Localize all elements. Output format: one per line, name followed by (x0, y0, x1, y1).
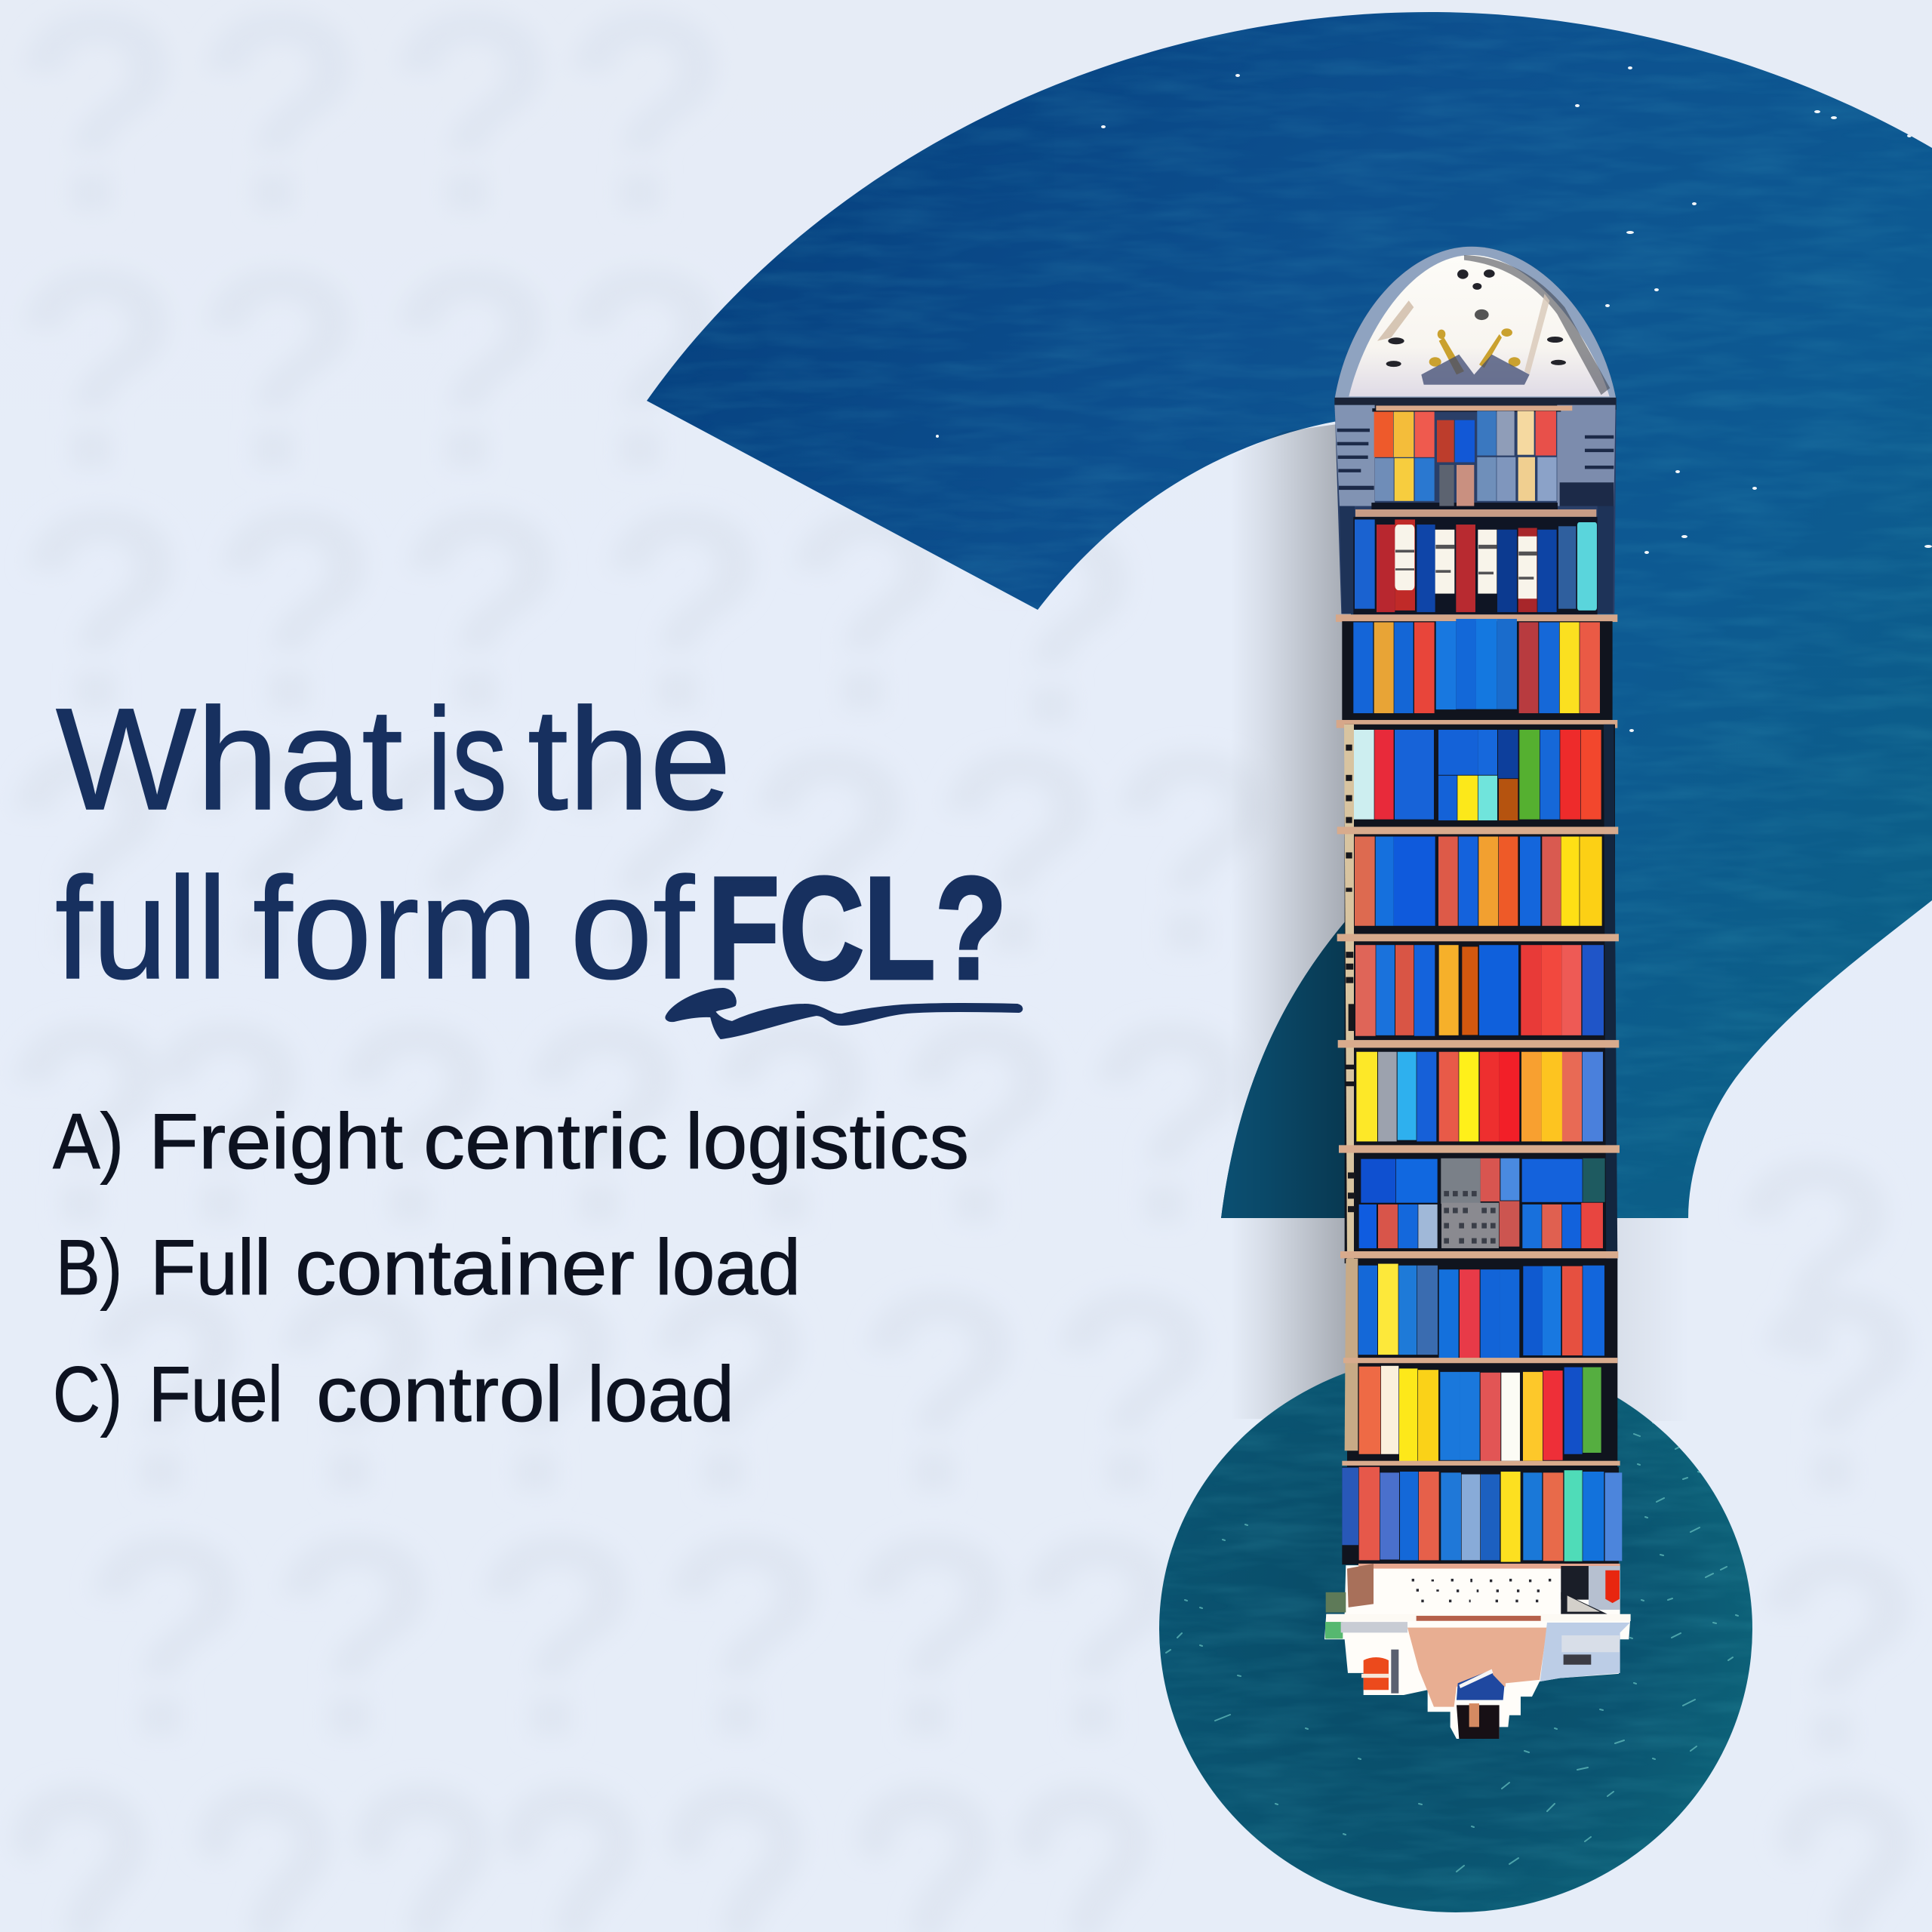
option C (53, 1351, 734, 1438)
container row 4 (1337, 730, 1618, 834)
option B (56, 1224, 801, 1312)
background pattern: faint question marks: ? (596, 450, 771, 771)
background pattern: faint question marks: ? (140, 963, 315, 1284)
option C: C) (53, 1351, 122, 1438)
background pattern: faint question marks: ? (844, 1476, 1020, 1797)
heading line 2: full (55, 847, 227, 1009)
option A: logistics (685, 1098, 969, 1186)
bow containers (1355, 405, 1596, 517)
heading (55, 678, 1007, 1009)
heading line 1: the (528, 678, 731, 840)
container row 2 (1336, 519, 1617, 622)
background pattern: faint question marks: ? (642, 1231, 817, 1552)
question mark: ocean dot (1155, 1343, 1758, 1917)
option A (53, 1098, 969, 1186)
background pattern: faint question marks: ? (14, 450, 189, 771)
background pattern: faint question marks: ? (208, 450, 383, 771)
background pattern: faint question marks: ? (0, 691, 175, 1012)
option B: load (655, 1224, 801, 1312)
background pattern: faint question marks: ? (0, 963, 175, 1284)
background pattern: faint question marks: ? (366, 691, 541, 1012)
background pattern: faint question marks: ? (781, 450, 956, 771)
container row 5 (1337, 836, 1619, 941)
background pattern: faint question marks: ? (706, 963, 881, 1284)
option C: control (316, 1351, 563, 1438)
background pattern: faint question marks: ? (517, 963, 692, 1284)
container row 7 (1339, 1052, 1620, 1153)
ship bow (1334, 247, 1617, 728)
option C: Fuel (149, 1351, 283, 1438)
background pattern: faint question marks: ? (1083, 963, 1258, 1284)
container row 9 (1343, 1264, 1617, 1363)
background pattern: faint question marks: ? (558, 208, 734, 529)
background pattern: faint question marks: ? (268, 1231, 443, 1552)
question mark: ocean hook and stem (604, 0, 1932, 1223)
background pattern: faint question marks: ? (932, 691, 1107, 1012)
container row 10 (1342, 1366, 1620, 1466)
heading line 2 (55, 847, 695, 1009)
background pattern: faint question marks: ? (1045, 1231, 1220, 1552)
background pattern: faint question marks: ? (1011, 1476, 1186, 1797)
ship shadow on background (1230, 421, 1690, 1421)
background pattern: faint question marks: ? (970, 465, 1145, 786)
option B: Full (150, 1224, 271, 1312)
background pattern: faint question marks: ? (555, 691, 730, 1012)
option B: B) (56, 1224, 122, 1312)
container row 3 (1337, 619, 1617, 728)
background pattern: faint question marks: ? (1751, 1231, 1926, 1552)
background pattern: faint question marks: ? (395, 450, 570, 771)
stern deck and superstructure (1324, 1564, 1631, 1739)
option B: container (295, 1224, 635, 1312)
background pattern: faint question marks: ? (454, 1231, 629, 1552)
background pattern: faint question marks: ? (385, 208, 560, 529)
container row 6 (1338, 945, 1619, 1048)
background pattern: faint question marks: ? (894, 963, 1069, 1284)
heading line 1 (56, 678, 731, 840)
container row 11 (1342, 1467, 1622, 1564)
background pattern: faint question marks: ? (328, 963, 503, 1284)
ship midsection (1337, 724, 1620, 1263)
heading line 2: form (253, 847, 538, 1009)
background pattern: faint question marks: ? (79, 1231, 254, 1552)
container row 8 (1340, 1158, 1618, 1258)
background pattern: faint question marks: ? (853, 1231, 1028, 1552)
ship stern (1324, 1259, 1631, 1739)
background pattern: faint question marks: ? (743, 691, 918, 1012)
background pattern: faint question marks: ? (192, 208, 368, 529)
background pattern: faint question marks: ? (469, 1476, 645, 1797)
heading emphasis FCL: FCL? (708, 847, 1007, 1009)
background pattern: faint question marks: ? (10, 208, 185, 529)
background pattern: faint question marks: ? (268, 1476, 443, 1797)
heading line 1: What (56, 678, 403, 840)
background pattern: faint question marks: ? (657, 1476, 832, 1797)
background pattern: faint question marks: ? (1728, 1099, 1903, 1420)
option A: centric (423, 1098, 668, 1186)
container ship (1324, 247, 1631, 1739)
option C: load (587, 1351, 734, 1438)
background pattern: faint question marks: ? (177, 691, 352, 1012)
hand-drawn underline (666, 989, 1022, 1038)
option A: A) (53, 1098, 124, 1186)
answer options (53, 1098, 969, 1438)
background pattern: faint question marks: ? (79, 1476, 254, 1797)
background pattern: faint question marks: ? (1106, 691, 1281, 1012)
heading line 2: of (570, 847, 695, 1009)
background pattern: faint question marks: ? (1751, 1491, 1926, 1812)
option A: Freight (149, 1098, 403, 1186)
heading line 1: is (427, 678, 507, 840)
